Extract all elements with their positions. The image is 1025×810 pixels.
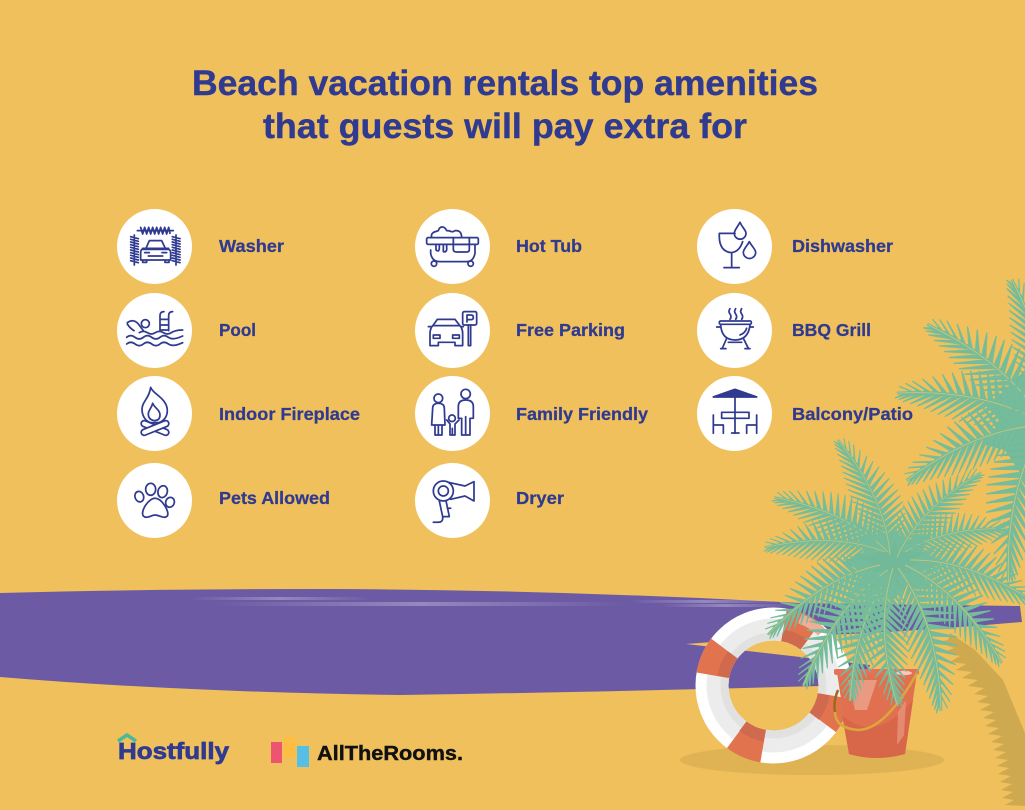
- label: Dishwasher: Dishwasher: [792, 236, 893, 256]
- palm trunk shadow: [938, 633, 1025, 806]
- label: Balcony/Patio: Balcony/Patio: [792, 404, 913, 424]
- palm tree: front: [753, 434, 1025, 715]
- icon circle: free parking: [415, 293, 490, 368]
- label: Indoor Fireplace: Indoor Fireplace: [219, 404, 360, 424]
- label: Washer: Washer: [219, 236, 284, 256]
- title: [192, 64, 818, 146]
- palm tree: top right: [893, 278, 1025, 586]
- title: Beach vacation rentals top amenities: [192, 64, 818, 103]
- icon circle: indoor fireplace: [117, 376, 192, 451]
- label: Pool: Pool: [219, 320, 256, 340]
- label: Dryer: Dryer: [516, 488, 564, 508]
- logo: Hostfully: Hostfully: [118, 738, 229, 764]
- ground shadow: [680, 745, 944, 775]
- icon circle: dishwasher: [697, 209, 772, 284]
- sea: [0, 589, 1022, 695]
- logo: AllTheRooms: [271, 737, 463, 767]
- icon circle: bbq grill: [697, 293, 772, 368]
- title: that guests will pay extra for: [263, 107, 747, 146]
- label: Hot Tub: Hot Tub: [516, 236, 582, 256]
- label: Pets Allowed: Pets Allowed: [219, 488, 330, 508]
- bucket: [834, 669, 919, 758]
- icon circle: balcony/patio: [697, 376, 772, 451]
- logo: AllTheRooms: AllTheRooms.: [317, 743, 463, 765]
- icon circle: dryer: [415, 463, 490, 538]
- icon circle: family friendly: [415, 376, 490, 451]
- life ring: [680, 592, 867, 779]
- label: Free Parking: Free Parking: [516, 320, 625, 340]
- icon circle: pets allowed: [117, 463, 192, 538]
- label: BBQ Grill: BBQ Grill: [792, 320, 871, 340]
- icon circle: pool: [117, 293, 192, 368]
- icon circle: washer: [117, 209, 192, 284]
- label: Family Friendly: Family Friendly: [516, 404, 648, 424]
- icon circle: hot tub: [415, 209, 490, 284]
